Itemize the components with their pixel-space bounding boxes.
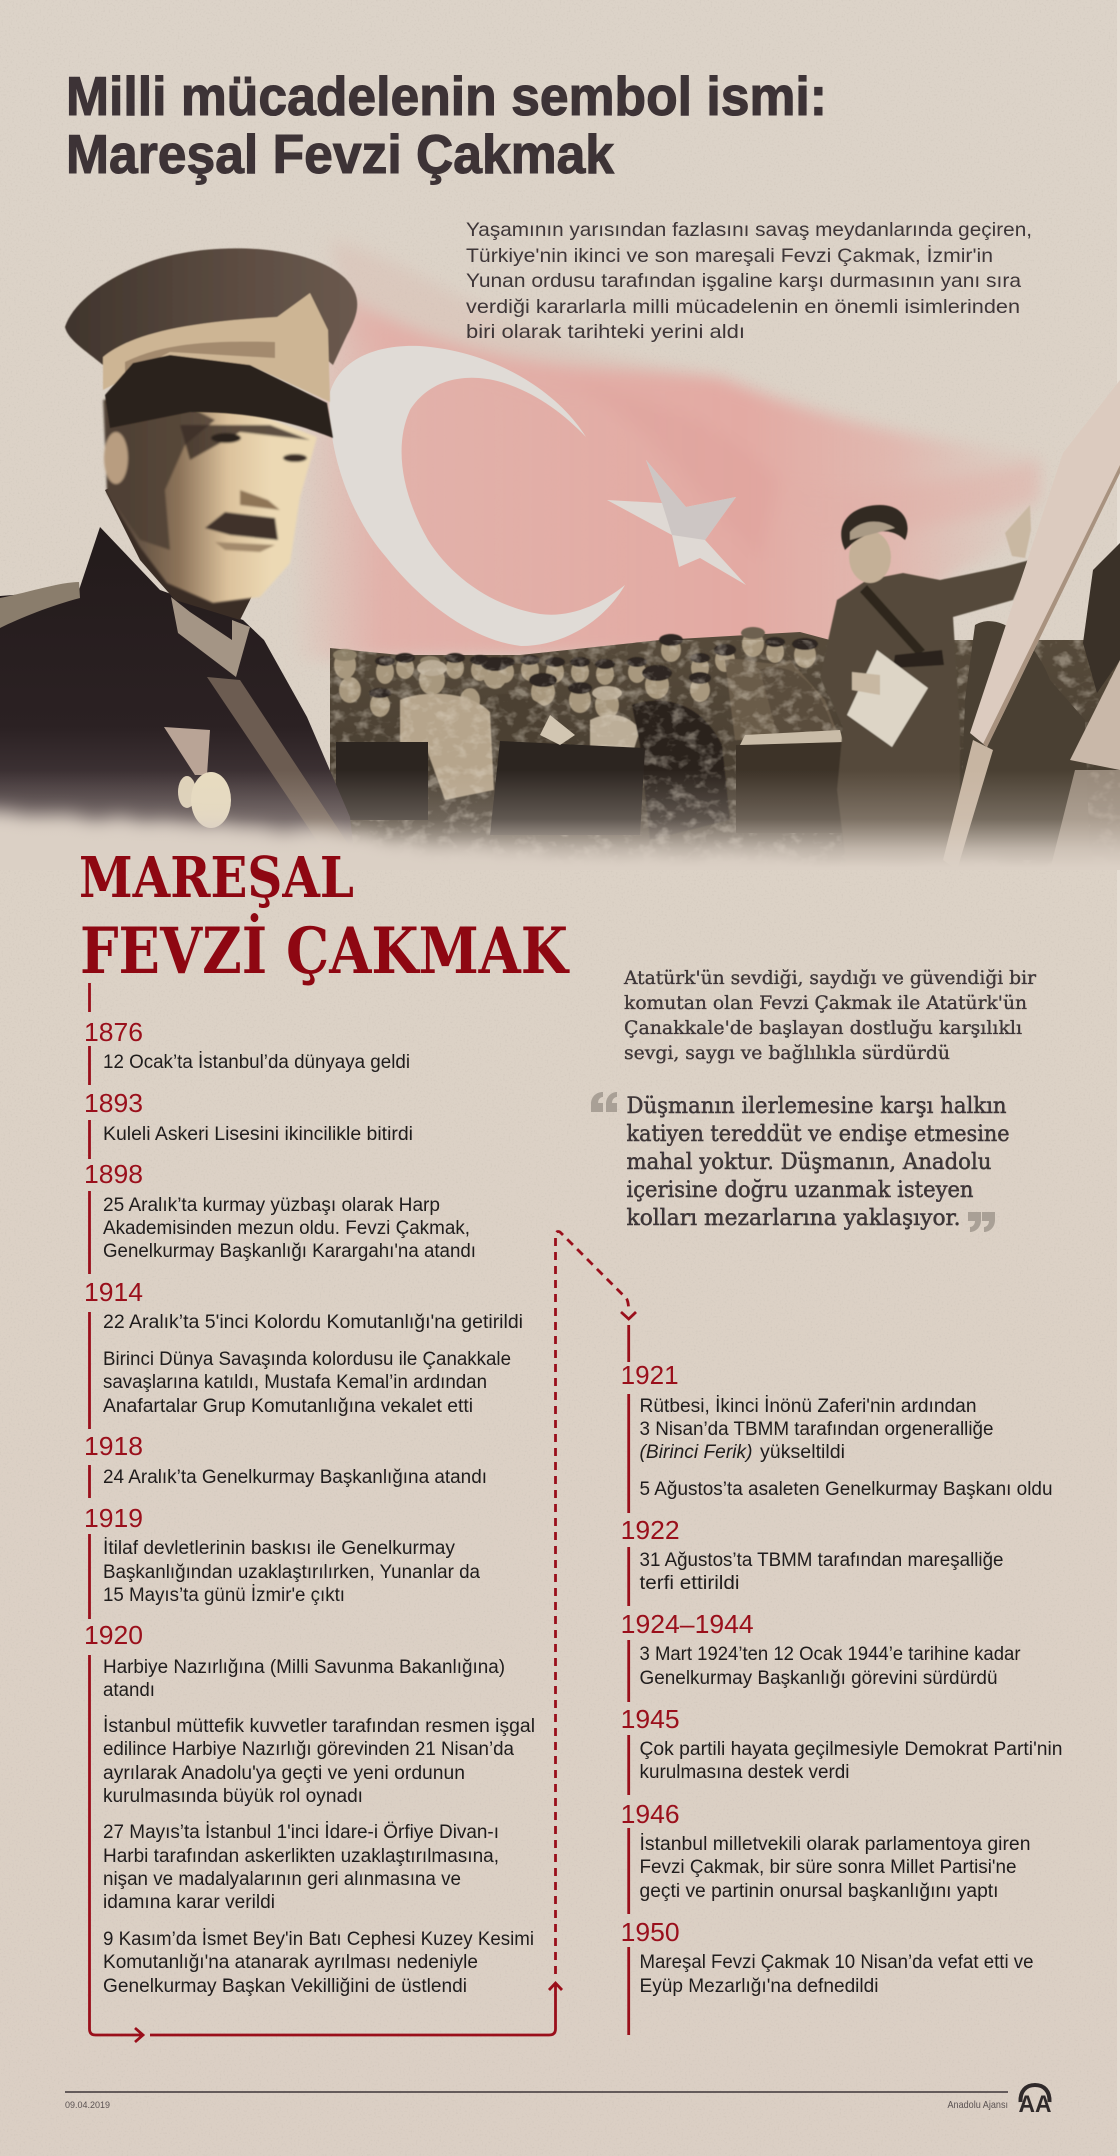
entry 1950: Eyüp Mezarlığı'na defnedildi	[640, 1976, 878, 1997]
entry 1921: Rütbesi, İkinci İnönü Zaferi'nin ardından	[640, 1396, 976, 1417]
entry 1924-1944: 1924–1944	[621, 1609, 754, 1639]
footer credit: Anadolu Ajansı	[948, 2099, 1008, 2111]
portrait cap	[65, 248, 357, 438]
entry 1920: 27 Mayıs’ta İstanbul 1'inci İdare-i Örfiye Divan-ı	[103, 1822, 499, 1843]
title	[66, 65, 827, 185]
entry 1893: Kuleli Askeri Lisesini ikincilikle bitirdi	[103, 1124, 413, 1145]
entry 1898: 1898	[84, 1159, 143, 1189]
portrait sash	[207, 677, 352, 860]
quote text: mahal yoktur. Düşmanın, Anadolu	[626, 1150, 992, 1175]
entry 1921: yükseltildi	[760, 1442, 845, 1463]
entry 1922: 31 Ağustos’ta TBMM tarafından mareşalliğe	[640, 1550, 1004, 1571]
entry 1876: 12 Ocak’ta İstanbul’da dünyaya geldi	[103, 1052, 410, 1073]
icon: closing quote mark	[968, 1212, 995, 1232]
icon: opening quote mark	[591, 1092, 617, 1112]
timeline: left column	[84, 983, 636, 2042]
map board	[943, 380, 1120, 870]
entry 1950	[621, 1917, 1034, 2035]
entry 1920: Harbiye Nazırlığına (Milli Savunma Bakanlığına)	[103, 1657, 505, 1678]
right text: friendship with Atatürk: Atatürk'ün sevdiği, saydığı ve güvendiği bir	[623, 967, 1037, 989]
flag crescent	[329, 346, 625, 646]
entry 1920: edilince Harbiye Nazırlığı görevinden 21 Nisan’da	[103, 1739, 514, 1760]
portrait face	[103, 385, 317, 603]
quote text: Düşmanın ilerlemesine karşı halkın	[626, 1094, 1006, 1119]
entry 1919: İtilaf devletlerinin baskısı ile Genelkurmay	[103, 1538, 455, 1559]
right column start stroke	[627, 1325, 630, 1362]
portrait medal	[164, 727, 231, 828]
entry 1924-1944	[621, 1609, 1021, 1702]
entry 1950: Mareşal Fevzi Çakmak 10 Nisan’da vefat etti ve	[640, 1952, 1034, 1973]
entry 1945: 1945	[621, 1704, 680, 1734]
entry 1924-1944: Genelkurmay Başkanlığı görevini sürdürdü	[640, 1668, 998, 1689]
entry 1920: idamına karar verildi	[103, 1892, 275, 1913]
icon: AA logo: AA	[1018, 2091, 1052, 2118]
intro text: biri olarak tarihteki yerini aldı	[466, 321, 745, 343]
entry 1914: savaşlarına katıldı, Mustafa Kemal’in ardından	[103, 1372, 487, 1393]
entry 1914: Birinci Dünya Savaşında kolordusu ile Çanakkale	[103, 1349, 511, 1370]
seated officers	[400, 659, 840, 840]
entry 1921: 5 Ağustos’ta asaleten Genelkurmay Başkanı oldu	[640, 1479, 1052, 1500]
entry 1945: kurulmasına destek verdi	[640, 1762, 850, 1783]
entry 1898	[84, 1159, 476, 1274]
entry 1914	[84, 1277, 523, 1429]
right text: friendship with Atatürk: sevgi, saygı ve bağlılıkla sürdürdü	[624, 1042, 950, 1064]
intro text: Yaşamının yarısından fazlasını savaş meydanlarında geçiren,	[466, 219, 1032, 241]
entry 1920	[84, 1620, 535, 1997]
entry 1921: 1921	[621, 1360, 679, 1390]
entry 1922	[621, 1515, 1004, 1606]
portrait neck	[105, 470, 255, 620]
entry 1893	[84, 1088, 413, 1159]
entry 1920: 1920	[84, 1620, 143, 1650]
title: Milli mücadelenin sembol ismi:	[66, 65, 827, 127]
entry 1919: Başkanlığından uzaklaştırılırken, Yunanlar da	[103, 1562, 480, 1583]
photo collage	[0, 248, 1120, 870]
entry 1919: 1919	[84, 1503, 143, 1533]
entry 1922: terfi ettirildi	[640, 1573, 740, 1594]
entry 1918: 1918	[84, 1431, 143, 1461]
entry 1920: Genelkurmay Başkan Vekilliğini de üstlendi	[103, 1976, 467, 1997]
entry 1945	[621, 1704, 1062, 1795]
entry 1946: İstanbul milletvekili olarak parlamentoya giren	[640, 1834, 1030, 1855]
crowd photo	[330, 621, 1120, 870]
main name heading: FEVZİ ÇAKMAK	[80, 913, 570, 989]
tables	[336, 715, 843, 835]
footer	[65, 2085, 1052, 2118]
entry 1920: ayrılarak Anadolu'ya geçti ve yeni ordunun	[103, 1763, 465, 1784]
timeline: right column	[621, 1325, 1062, 2035]
entry 1946: geçti ve partinin onursal başkanlığını yaptı	[640, 1881, 998, 1902]
right text: friendship with Atatürk: Çanakkale'de başlayan dostluğu karşılıklı	[624, 1017, 1022, 1039]
entry 1918: 24 Aralık’ta Genelkurmay Başkanlığına atandı	[103, 1467, 487, 1488]
entry 1945: Çok partili hayata geçilmesiyle Demokrat Parti'nin	[640, 1739, 1062, 1760]
entry 1919: 15 Mayıs’ta günü İzmir'e çıktı	[103, 1585, 345, 1606]
entry 1898: 25 Aralık’ta kurmay yüzbaşı olarak Harp	[103, 1195, 440, 1216]
entry 1893: 1893	[84, 1088, 143, 1118]
entry 1920: kurulmasında büyük rol oynadı	[103, 1786, 363, 1807]
person behind board	[960, 621, 1090, 860]
quote	[591, 1092, 1010, 1232]
entry 1914: 22 Aralık’ta 5'inci Kolordu Komutanlığı'na getirildi	[103, 1312, 523, 1333]
entry 1920: Komutanlığı'na atanarak ayrılması nedeniyle	[103, 1952, 478, 1973]
main name heading	[79, 845, 570, 989]
entry 1919	[84, 1503, 480, 1619]
entry 1924-1944: 3 Mart 1924’ten 12 Ocak 1944’e tarihine kadar	[640, 1644, 1021, 1665]
entry 1898: Akademisinden mezun oldu. Fevzi Çakmak,	[103, 1218, 470, 1239]
entry 1946	[621, 1799, 1030, 1914]
entry 1946: Fevzi Çakmak, bir süre sonra Millet Partisi'ne	[640, 1857, 1016, 1878]
quote text: katiyen tereddüt ve endişe etmesine	[626, 1122, 1010, 1147]
entry 1914: 1914	[84, 1277, 143, 1307]
main name heading: MAREŞAL	[79, 845, 354, 911]
entry 1876	[84, 1017, 410, 1085]
right text: friendship with Atatürk: komutan olan Fevzi Çakmak ile Atatürk'ün	[624, 992, 1027, 1014]
intro text	[466, 219, 1032, 343]
entry 1920: Harbi tarafından askerlikten uzaklaştırılmasına,	[103, 1846, 499, 1867]
entry 1921: (Birinci Ferik)	[640, 1442, 752, 1463]
crowd photo texture	[330, 640, 1120, 870]
quote text: kolları mezarlarına yaklaşıyor.	[626, 1206, 960, 1231]
title: Mareşal Fevzi Çakmak	[66, 123, 614, 185]
entry 1898: Genelkurmay Başkanlığı Karargahı'na atandı	[103, 1241, 476, 1262]
right text: friendship with Atatürk	[623, 967, 1037, 1064]
portrait uniform	[0, 527, 355, 860]
entry 1946: 1946	[621, 1799, 680, 1829]
speaking general	[820, 505, 1031, 870]
entry 1876: 1876	[84, 1017, 143, 1047]
portrait collar	[171, 597, 250, 677]
connector arrow: bottom left	[90, 1655, 143, 2042]
entry 1920: nişan ve madalyalarının geri alınmasına ve	[103, 1869, 461, 1890]
turkish flag	[281, 240, 1040, 660]
entry 1920: atandı	[103, 1680, 155, 1701]
entry 1921: 3 Nisan’da TBMM tarafından orgeneralliğe	[640, 1419, 994, 1440]
entry 1914: Anafartalar Grup Komutanlığına vekalet etti	[103, 1396, 473, 1417]
entry 1921	[621, 1360, 1052, 1513]
intro text: Yunan ordusu tarafından işgaline karşı durmasının yanı sıra	[466, 270, 1021, 292]
crowd heads	[333, 627, 818, 719]
entry 1920: İstanbul müttefik kuvvetler tarafından resmen işgal	[103, 1716, 535, 1737]
connector top stroke	[88, 983, 91, 1012]
intro text: Türkiye'nin ikinci ve son mareşali Fevzi Çakmak, İzmir'in	[466, 244, 993, 267]
footer date: 09.04.2019	[65, 2100, 110, 2111]
flag star	[607, 460, 746, 585]
quote text: içerisine doğru uzanmak isteyen	[626, 1178, 974, 1203]
connector arrow: bottom to up	[150, 1983, 562, 2035]
fog edge	[0, 770, 1120, 960]
entry 1950: 1950	[621, 1917, 680, 1947]
entry 1918	[84, 1431, 487, 1498]
connector dashed arrow to next column	[556, 1232, 636, 1974]
entry 1922: 1922	[621, 1515, 680, 1545]
intro text: verdiği kararlarla milli mücadelenin en önemli isimlerinden	[466, 296, 1020, 318]
portrait of Fevzi Çakmak	[0, 248, 357, 860]
entry 1920: 9 Kasım’da İsmet Bey'in Batı Cephesi Kuzey Kesimi	[103, 1929, 534, 1950]
quote text	[626, 1094, 1010, 1231]
portrait epaulette	[0, 582, 80, 628]
